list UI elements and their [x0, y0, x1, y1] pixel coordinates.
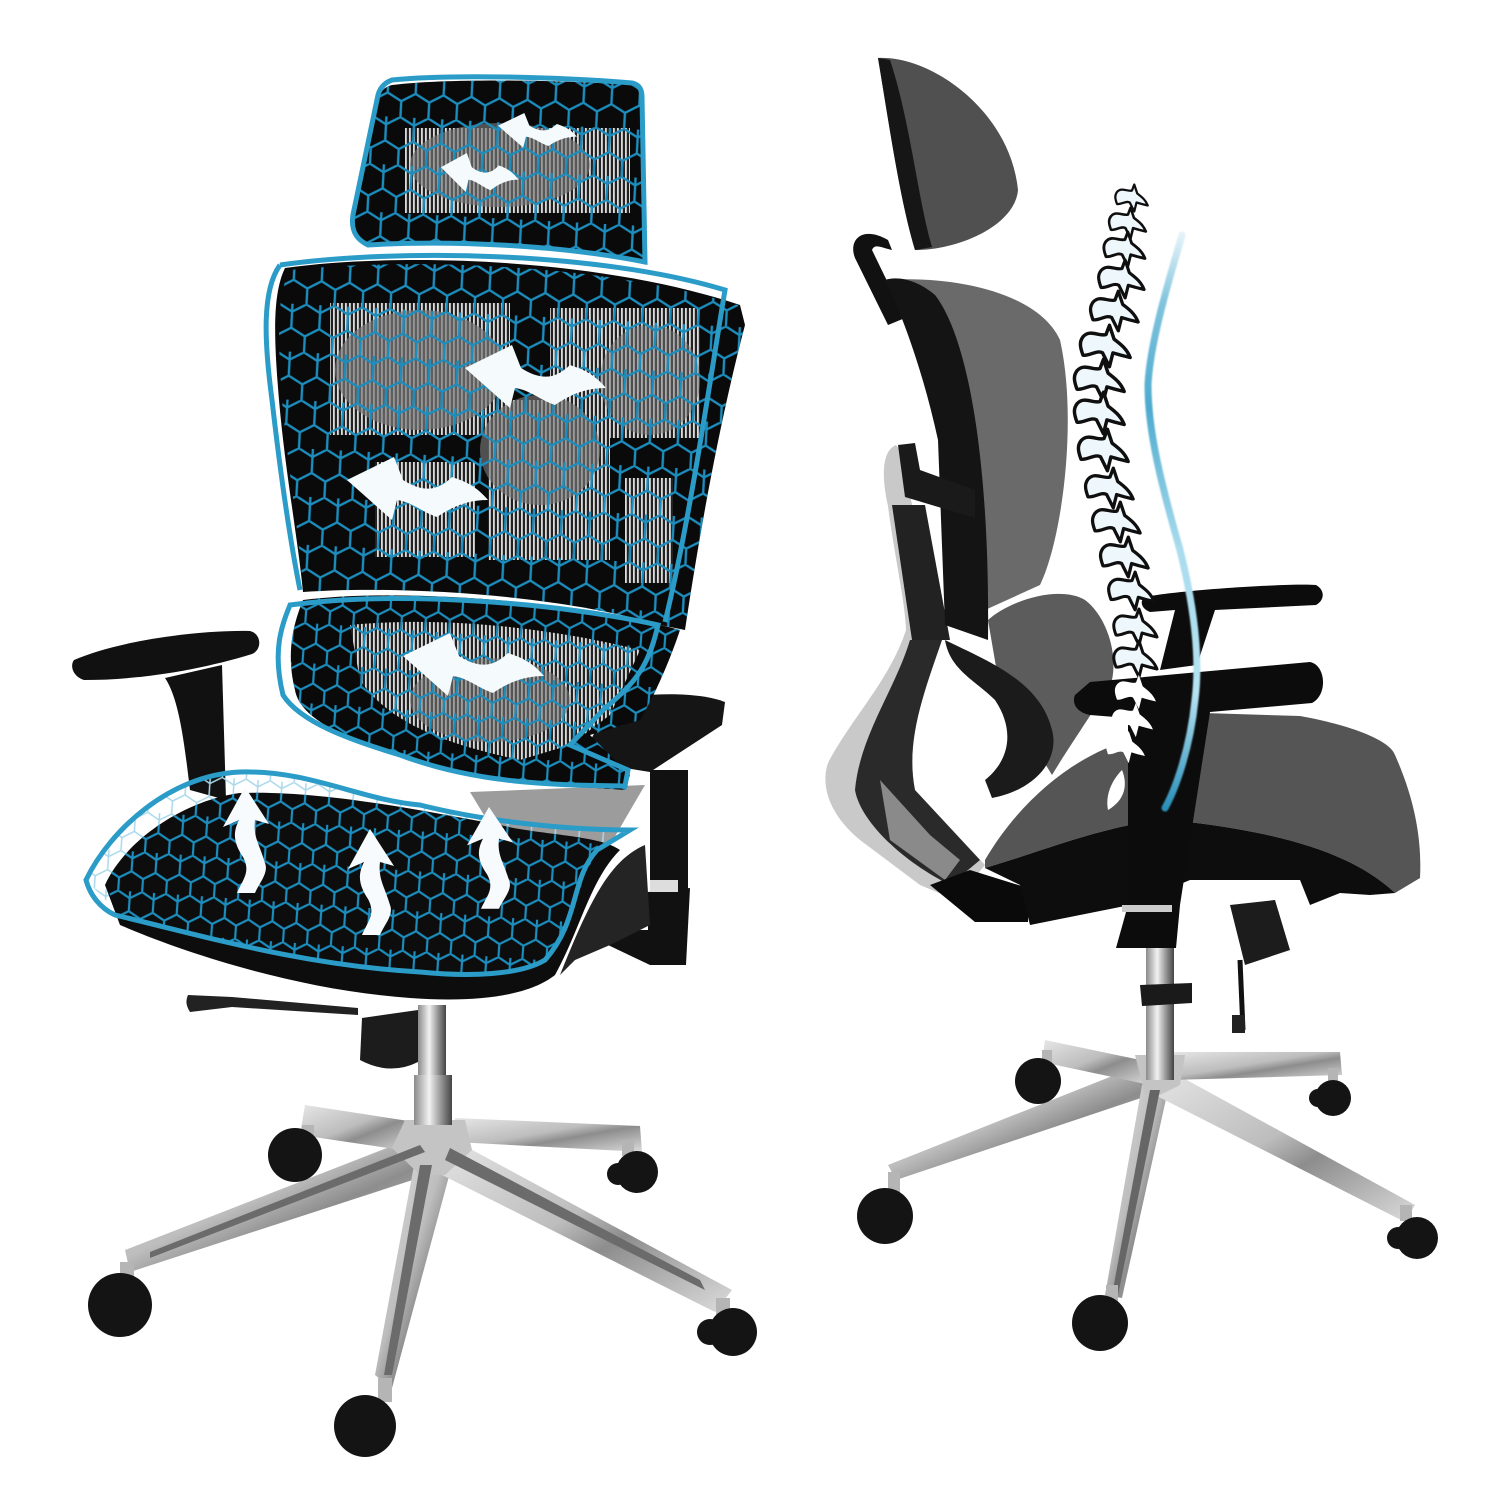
panel: lumbar mesh [276, 595, 680, 790]
right gas column [1140, 900, 1290, 1080]
seat underside bracket [560, 845, 650, 975]
left armrest, viewer's right [588, 694, 725, 965]
rising air arrows [223, 787, 513, 935]
right chair base [857, 1040, 1438, 1351]
chrome back frame [825, 445, 1028, 922]
panel: seat mesh [86, 772, 630, 999]
left armrest, viewer's left [72, 631, 259, 800]
seat mesh, side [985, 713, 1420, 925]
spine alignment line [1148, 235, 1197, 808]
airflow arrows [347, 345, 606, 520]
airflow arrow [403, 633, 544, 696]
armrests, side [1074, 585, 1323, 948]
metal frame behind seat [470, 785, 645, 845]
lumbar support, side [945, 594, 1113, 798]
casters [88, 1125, 757, 1457]
airflow arrows [441, 113, 577, 192]
spine illustration [1074, 184, 1157, 810]
casters [857, 1050, 1438, 1351]
back support strap [898, 443, 975, 518]
backrest, side [885, 278, 1068, 640]
left chair, front view with breathable mesh overlay [72, 70, 760, 1457]
panel: backrest mesh [260, 245, 760, 645]
left gas column and knob [186, 995, 452, 1125]
left chair base [88, 1105, 757, 1457]
headrest, side [853, 58, 1018, 325]
panel: headrest mesh [350, 74, 648, 265]
right chair, side view with spine alignment [825, 58, 1438, 1351]
